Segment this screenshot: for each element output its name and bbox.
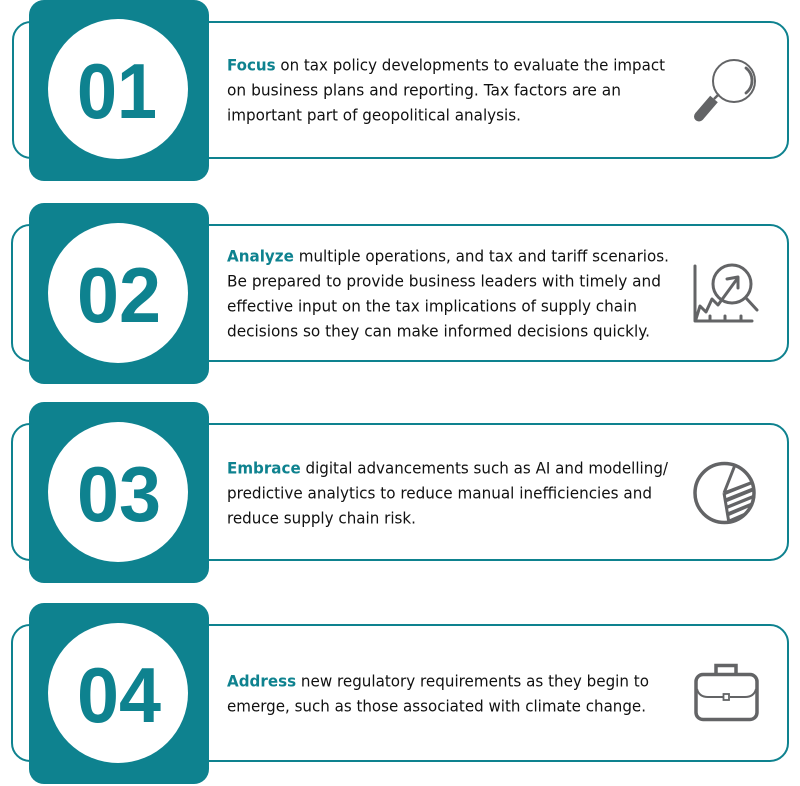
number badge 04: 04 — [77, 651, 161, 739]
number badge 03 — [29, 402, 209, 583]
text: analyze: decisions so they can make informed decisions quickly. — [227, 322, 650, 340]
text: embrace — [227, 460, 669, 528]
number badge 03: 03 — [77, 450, 161, 538]
card frame 03 — [12, 424, 788, 560]
text: analyze: effective input on the tax implications of supply chain — [227, 298, 637, 316]
text: analyze — [227, 248, 669, 340]
card frame 02 — [12, 225, 788, 361]
text: address: emerge, such as those associated with climate change. — [227, 698, 646, 716]
text: analyze: Analyze multiple operations, and tax and tariff scenarios. — [227, 248, 669, 266]
number badge 04 — [29, 603, 209, 784]
text: embrace: predictive analytics to reduce manual inefficiencies and — [227, 484, 652, 502]
number badge 01: 01 — [77, 47, 157, 135]
text: focus: important part of geopolitical analysis. — [227, 106, 521, 124]
panel: step 04 — [12, 603, 788, 784]
text: embrace: Embrace digital advancements such as AI and modelling/ — [227, 460, 669, 478]
icon: briefcase — [696, 666, 757, 720]
text: analyze: Be prepared to provide business leaders with timely and — [227, 272, 661, 290]
icon: magnifying glass — [694, 60, 755, 122]
text: address — [227, 672, 649, 716]
panel: step 01 — [13, 0, 788, 181]
icon: chart with magnifier — [695, 265, 757, 321]
number badge 01 — [29, 0, 209, 181]
text: focus: on business plans and reporting. Tax factors are an — [227, 82, 621, 100]
panel: step 02 — [12, 203, 788, 384]
text: address: Address new regulatory requirements as they begin to — [227, 672, 649, 690]
card frame 01 — [13, 22, 788, 158]
number badge 02: 02 — [77, 251, 161, 339]
text: focus — [227, 56, 665, 124]
text: embrace: reduce supply chain risk. — [227, 510, 416, 528]
icon: pie chart — [695, 464, 756, 523]
card frame 04 — [12, 625, 788, 761]
text: focus: Focus on tax policy developments to evaluate the impact — [227, 56, 665, 74]
panel: step 03 — [12, 402, 788, 583]
number badge 02 — [29, 203, 209, 384]
